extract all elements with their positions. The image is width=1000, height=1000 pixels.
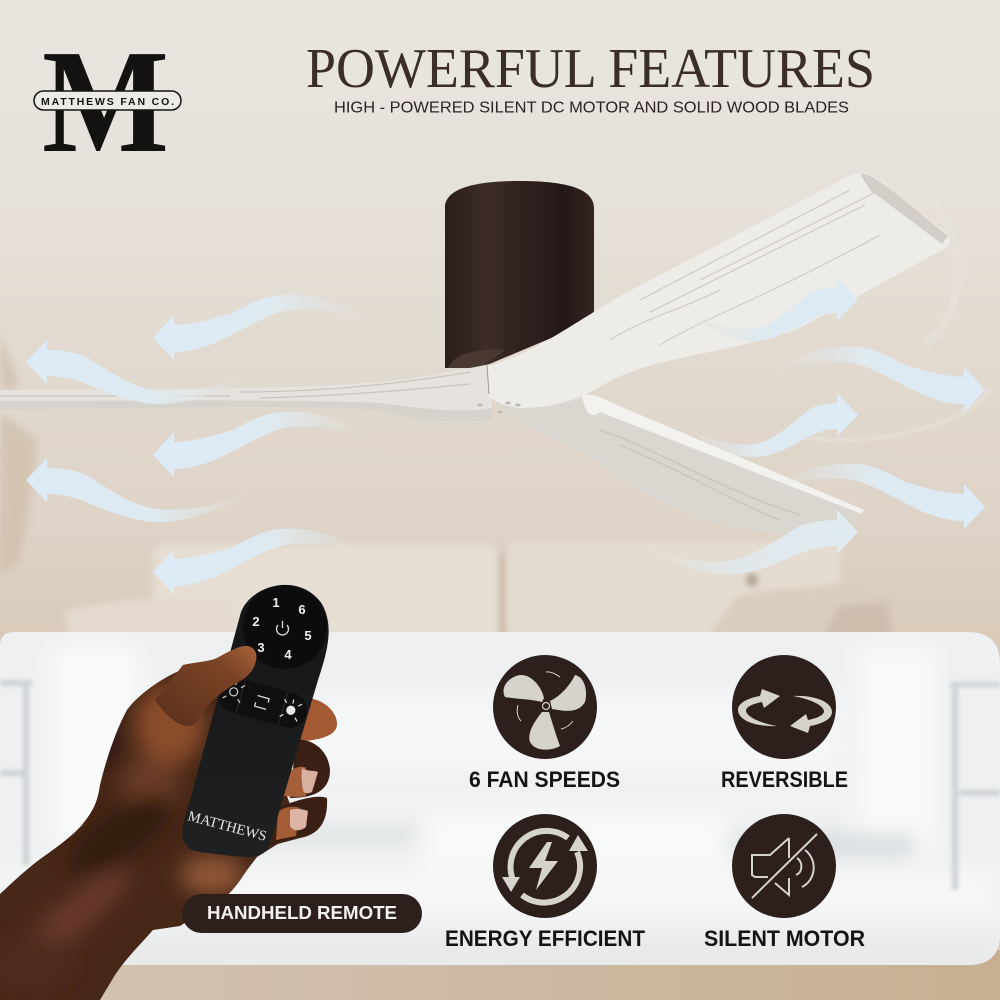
dial numbers: 1 (272, 595, 280, 610)
icon: energy (493, 814, 597, 918)
feature: reversible (721, 655, 848, 792)
arrow: right short 1 (680, 277, 858, 341)
airflow arrows left (26, 295, 367, 594)
arrow: left long 1 (26, 340, 257, 404)
subtitle: HIGH - POWERED SILENT DC MOTOR AND SOLID WOOD BLADES (334, 100, 849, 116)
handheld remote label: HANDHELD REMOTE (207, 903, 397, 923)
remote brand: MATTHEWS (186, 808, 268, 845)
ring finger (270, 797, 327, 846)
index finger (296, 698, 337, 742)
arrow: left 3 (153, 529, 367, 594)
feature panel (0, 632, 1000, 975)
blurred plant (0, 330, 38, 575)
arrow: left long 2 (26, 458, 257, 522)
label: REVERSIBLE (721, 767, 848, 792)
lower right blade (495, 394, 864, 534)
dial numbers: 2 (252, 614, 260, 629)
middle nail (302, 768, 318, 793)
ceiling fan (0, 173, 950, 534)
motor housing (445, 181, 594, 368)
arrow: right long 2 (771, 464, 985, 529)
hand holding remote (0, 585, 337, 1000)
dial numbers: 3 (257, 640, 265, 655)
icon: reverse arrows (732, 655, 836, 759)
dial numbers: 5 (304, 628, 312, 643)
logo monogram: M (42, 20, 169, 184)
dial numbers: 6 (298, 602, 306, 617)
icon: muted speaker (732, 814, 836, 918)
logo (34, 20, 181, 184)
button cluster (215, 674, 311, 732)
upper right blade (477, 173, 950, 414)
logo name pill (34, 91, 181, 110)
label: 6 FAN SPEEDS (469, 767, 620, 792)
blurred sofa inside panel (56, 652, 997, 965)
icon: fan (493, 655, 597, 759)
power button (276, 621, 289, 635)
dial numbers (252, 595, 312, 662)
remote control (182, 585, 329, 857)
middle fingertip (283, 767, 306, 797)
thumb (155, 646, 256, 726)
handheld remote label (182, 894, 422, 933)
ring nail (290, 809, 308, 830)
middle finger (290, 740, 330, 798)
feature: silent motor (704, 814, 865, 951)
feature: 6 fan speeds (469, 655, 620, 792)
icon: bright light (280, 697, 303, 721)
dial (243, 585, 327, 669)
title: POWERFUL FEATURES (306, 38, 875, 100)
icon: reverse (255, 696, 269, 709)
airflow arrows right (633, 277, 985, 574)
label: SILENT MOTOR (704, 926, 865, 951)
remote body (182, 585, 329, 857)
arrow: right short 2 (680, 393, 858, 457)
ring fingertip (276, 807, 300, 840)
left blade, edge on (0, 364, 492, 422)
label: ENERGY EFFICIENT (445, 926, 646, 951)
arrow: right long 1 (771, 347, 985, 412)
hand and forearm (0, 672, 290, 1000)
dial numbers: 4 (284, 647, 292, 662)
logo name pill: MATTHEWS FAN CO. (41, 96, 174, 108)
feature: energy efficient (445, 814, 646, 951)
icon: dim light (223, 679, 245, 703)
blurred sofa (64, 541, 892, 645)
arrow: right short 3 (633, 510, 858, 574)
arrow: left 1 (153, 295, 367, 360)
swirl around right blade (790, 195, 990, 440)
arrow: left 2 (153, 412, 367, 477)
